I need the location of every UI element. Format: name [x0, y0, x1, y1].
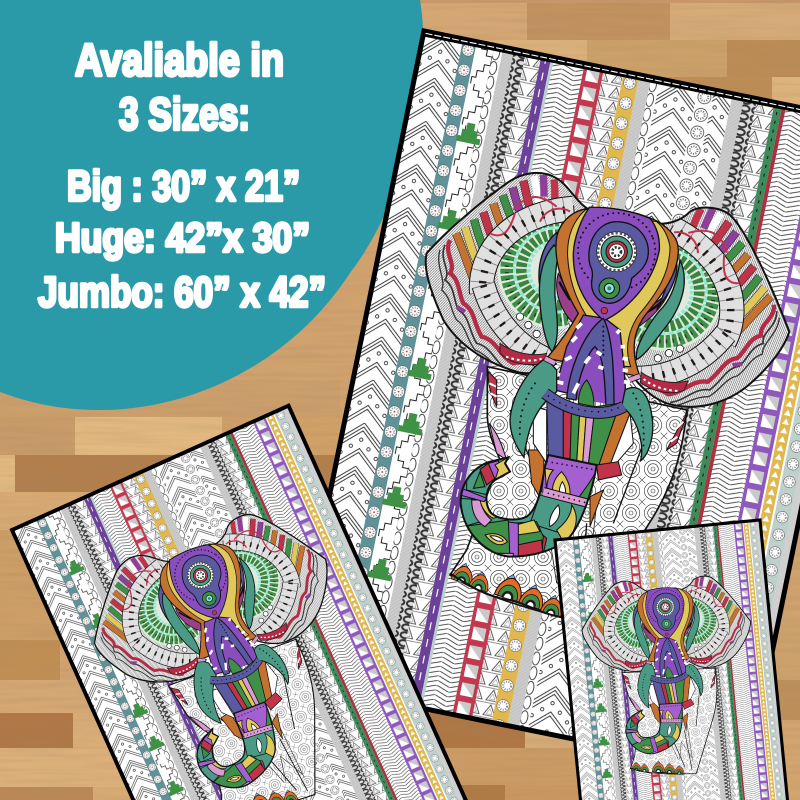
heading and size list: [38, 34, 326, 316]
poster: huge, top right: [292, 31, 800, 774]
small poster stripes: [555, 520, 789, 800]
size: Big: Big : 30” x 21”: [67, 162, 300, 210]
teal circle panel: [0, 0, 424, 410]
size: Jumbo: Jumbo: 60” x 42”: [38, 268, 326, 316]
heading line: Avaliable in: Avaliable in: [75, 34, 284, 86]
huge poster elephant: [365, 81, 800, 623]
poster: small, bottom right: [535, 504, 800, 800]
huge poster stripes: [292, 31, 800, 774]
small poster elephant: [535, 504, 800, 800]
size: Huge: Huge: 42”x 30”: [55, 214, 310, 260]
heading line: 3 Sizes: 3 Sizes:: [119, 88, 250, 140]
poster: big, bottom left: [0, 395, 466, 800]
big poster elephant: [0, 395, 465, 800]
big poster stripes: [12, 406, 466, 800]
